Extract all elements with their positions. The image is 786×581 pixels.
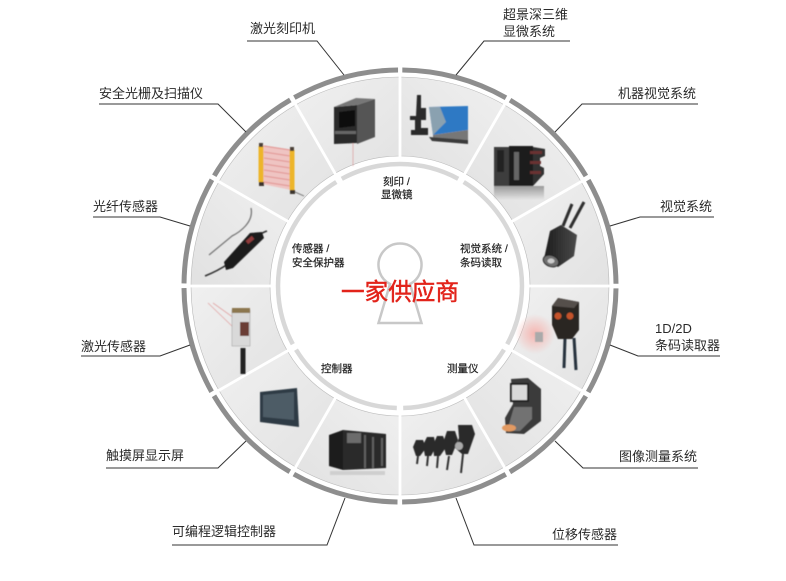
center title: 一家供应商 <box>341 279 459 306</box>
callout: vision system: 视觉系统 <box>660 199 712 214</box>
tile: code reader <box>513 286 609 390</box>
tile: fiber sensor <box>191 182 287 286</box>
inner ring <box>278 164 522 408</box>
category: measuring: 测量仪 <box>447 362 479 375</box>
callout: code reader <box>610 321 720 356</box>
callout: fiber sensor: 光纤传感器 <box>93 199 158 214</box>
callout: laser marker: 激光刻印机 <box>250 21 315 36</box>
callout: light curtain <box>99 86 246 132</box>
category: controllers: 控制器 <box>321 362 353 375</box>
callout: touch screen: 触摸屏显示屏 <box>106 448 184 463</box>
callout: laser marker <box>247 21 344 75</box>
icon: PLC <box>329 430 386 475</box>
keyhole <box>378 243 422 323</box>
tile: touch screen <box>219 351 335 467</box>
icon: code reader <box>515 298 579 370</box>
callout: laser sensor <box>81 339 190 356</box>
icon: displacement sensors <box>413 425 475 473</box>
category: marking / microscope: 显微镜 <box>381 188 413 201</box>
callout: code reader: 1D/2D <box>655 321 692 336</box>
callout: machine vision <box>555 86 698 132</box>
category: sensors / safety: 传感器 / <box>292 243 329 255</box>
callout: displacement sensor <box>456 498 618 545</box>
callout: image measurement <box>555 441 698 468</box>
callout: laser sensor: 激光传感器 <box>81 339 146 354</box>
callout: image measurement: 图像测量系统 <box>619 449 697 464</box>
callout: touch screen <box>106 441 246 468</box>
icon: laser marker <box>334 98 375 166</box>
callout: vision system <box>610 199 714 226</box>
category: vision / code reading: 视觉系统 / <box>460 243 508 255</box>
category labels <box>292 175 508 375</box>
tile: image measurement <box>465 351 581 467</box>
callout: fiber sensor <box>93 199 190 226</box>
icon: touch screen <box>260 388 299 427</box>
tile: depth microscope <box>400 77 504 173</box>
callout: depth microscope: 显微系统 <box>503 24 555 39</box>
tile: light curtain <box>219 105 335 221</box>
icon: light curtain <box>258 143 304 196</box>
callout: depth microscope: 超景深三维 <box>503 7 568 22</box>
callout: PLC <box>172 498 345 545</box>
icon: vision camera <box>542 202 584 269</box>
callout: light curtain: 安全光栅及扫描仪 <box>99 86 203 101</box>
category: marking / microscope: 刻印 / <box>383 176 410 188</box>
callout: machine vision: 机器视觉系统 <box>618 86 696 101</box>
tile: displacement sensor <box>400 399 504 495</box>
callout: depth microscope <box>456 7 570 75</box>
category: sensors / safety: 安全保护器 <box>292 256 345 269</box>
tile: machine vision <box>465 105 581 221</box>
tile separators <box>188 70 612 502</box>
icon: image measurement system <box>502 378 541 434</box>
outer ring <box>184 70 616 502</box>
callout: PLC: 可编程逻辑控制器 <box>172 524 276 539</box>
category: vision / code reading: 条码读取 <box>460 256 502 269</box>
tile: PLC <box>296 399 400 495</box>
callout: code reader: 条码读取器 <box>655 338 720 353</box>
tile: laser sensor <box>191 286 287 390</box>
icon: machine vision system <box>494 146 545 200</box>
tile ring <box>191 77 609 495</box>
callout: displacement sensor: 位移传感器 <box>552 527 617 542</box>
icon: fiber sensor <box>205 208 267 276</box>
tile: vision system <box>513 182 609 286</box>
icon: depth microscope <box>410 95 468 144</box>
icon: laser sensor <box>208 303 250 374</box>
tile: laser marker <box>296 77 400 173</box>
